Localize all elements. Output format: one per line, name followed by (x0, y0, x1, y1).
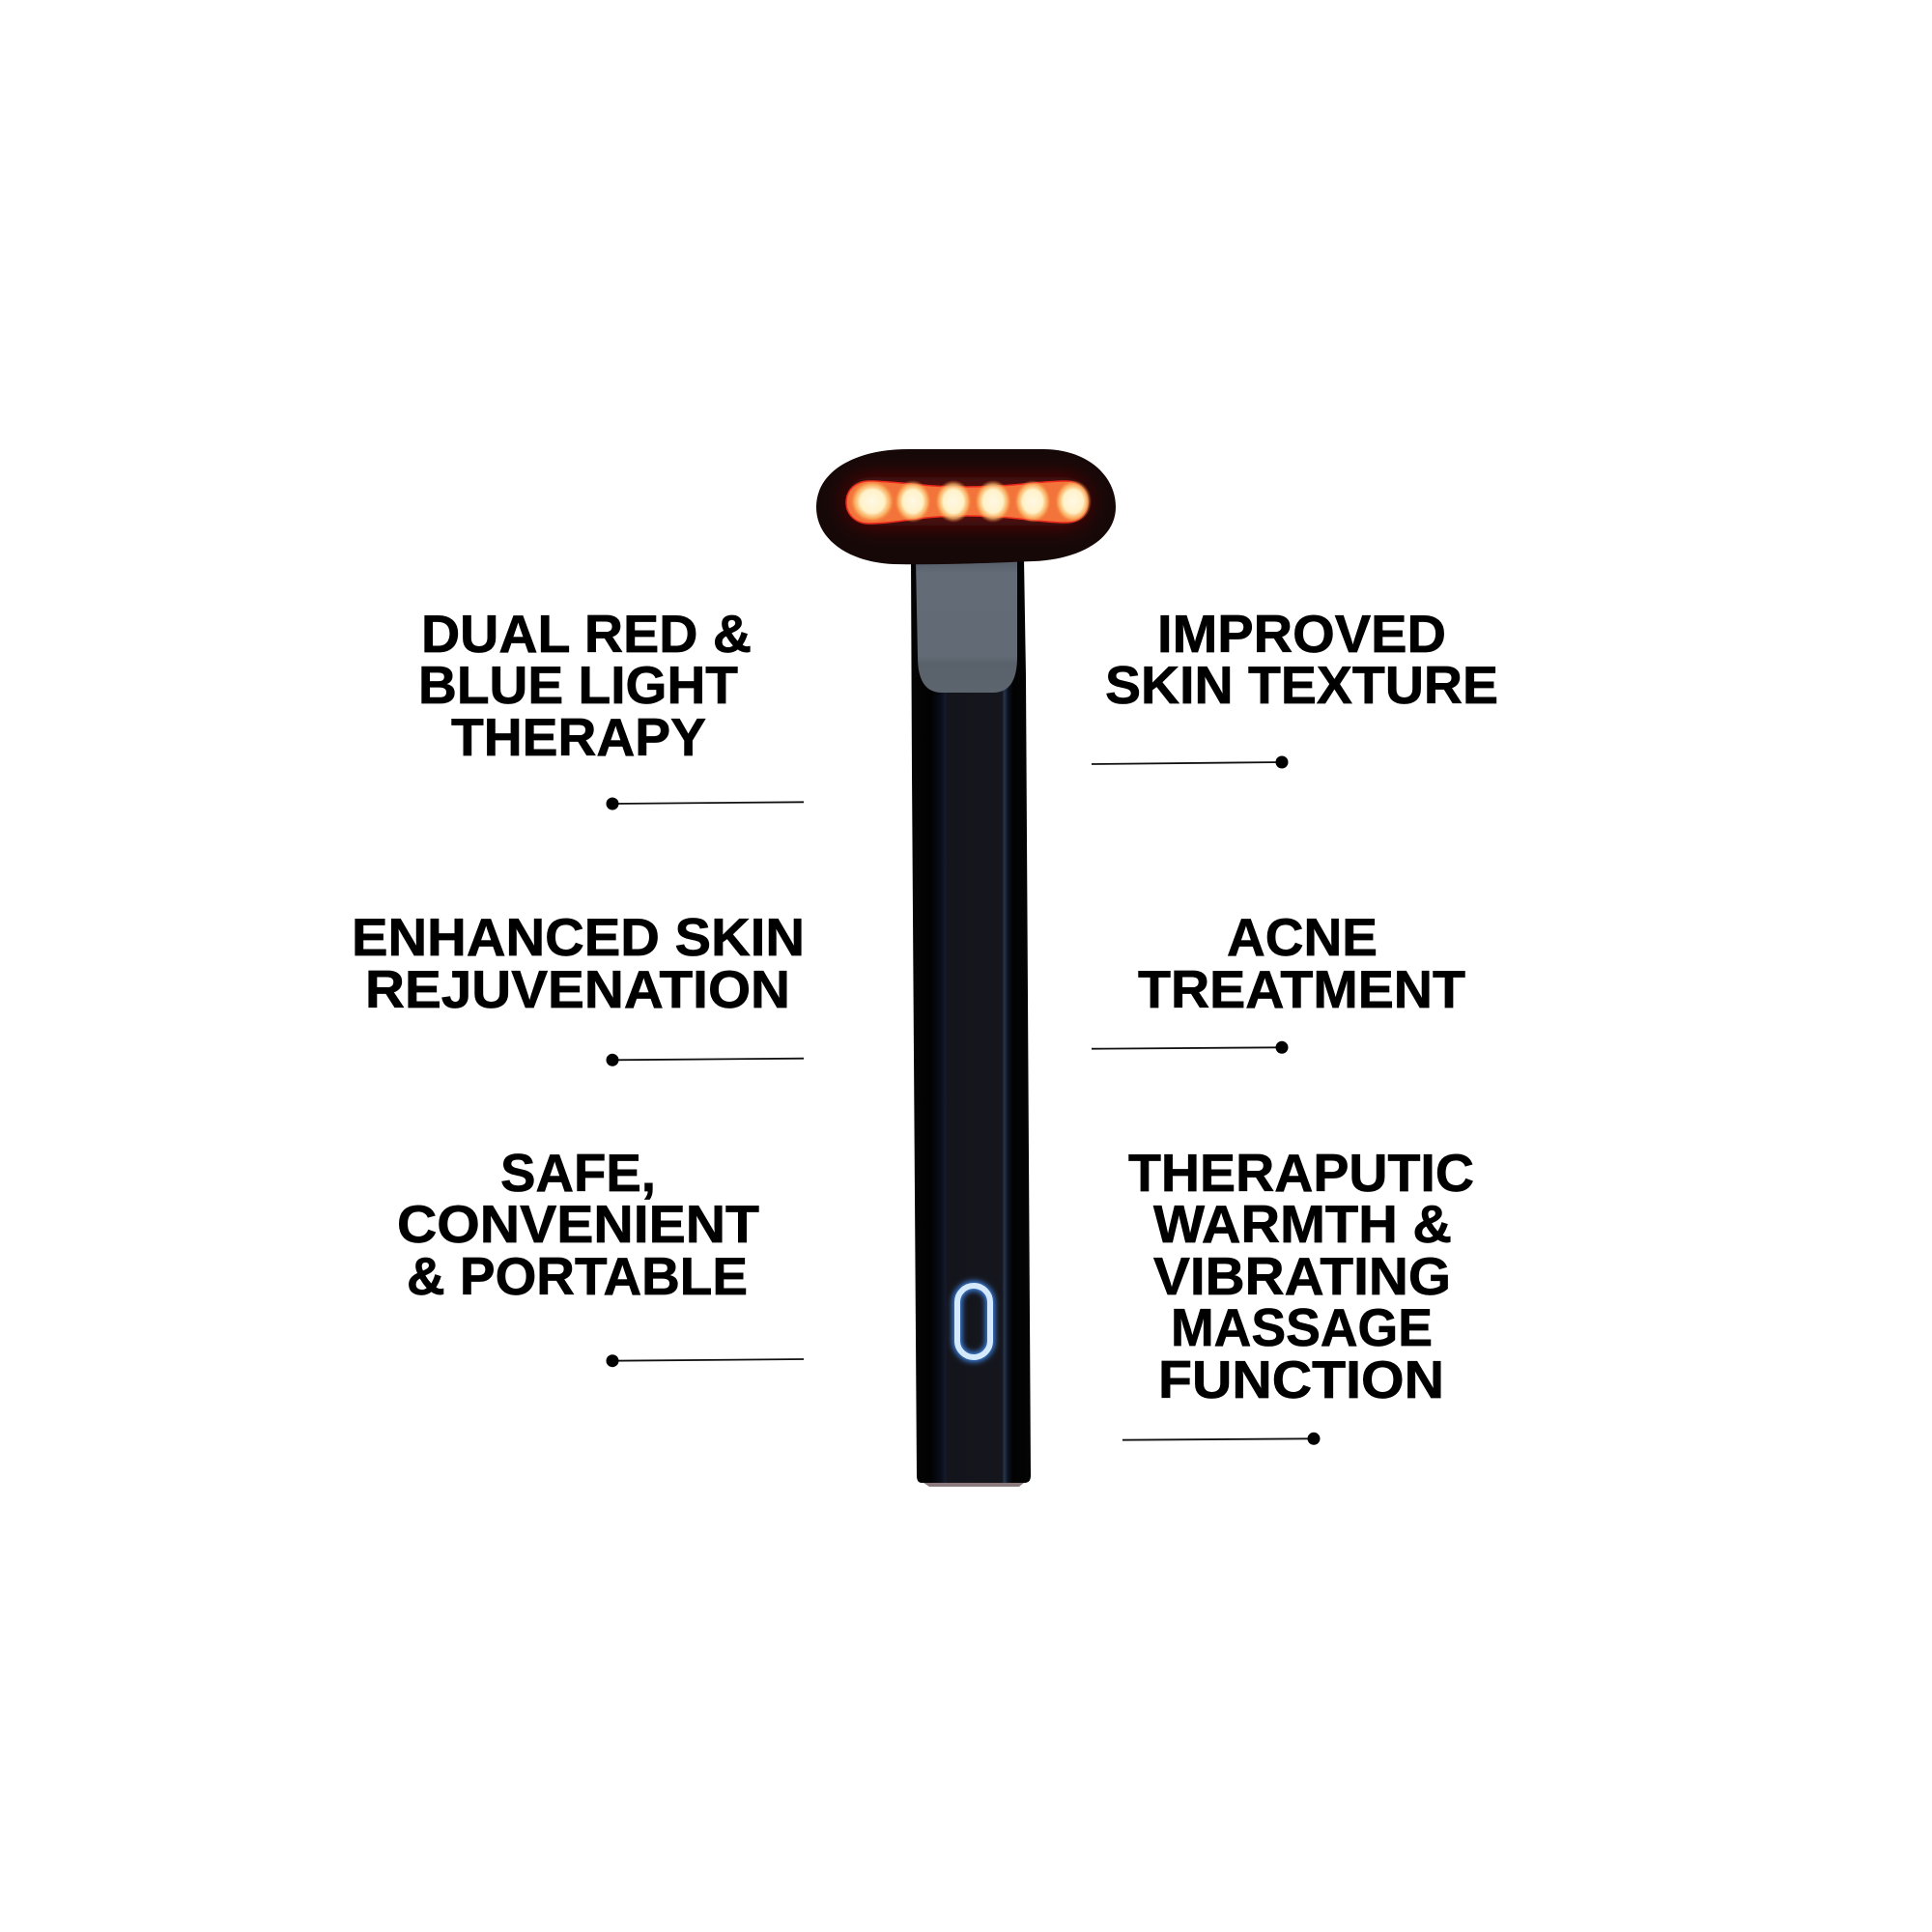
wand body (911, 558, 1031, 1483)
callout: improved skin texture (1092, 604, 1498, 769)
wand foot (923, 1483, 1024, 1487)
callout heading: CONVENIENT (397, 1194, 759, 1254)
callout leader line (607, 1354, 804, 1367)
LED lights (850, 480, 1092, 523)
callout heading (397, 1143, 759, 1306)
power button (957, 1286, 990, 1357)
callout leader line (1122, 1433, 1320, 1445)
callout heading (1128, 1143, 1474, 1409)
callout leader line (1092, 1041, 1289, 1054)
callout heading: ACNE (1227, 907, 1378, 967)
callout leader line (607, 1054, 804, 1066)
head red glow (845, 477, 1089, 526)
callout heading: IMPROVED (1157, 604, 1446, 664)
callout heading (352, 907, 805, 1019)
red light bar (846, 481, 1088, 524)
callout heading (1138, 907, 1465, 1019)
product: facial wand (816, 449, 1116, 1487)
callout heading: TREATMENT (1138, 959, 1465, 1019)
wand head (816, 449, 1116, 564)
callout heading: MASSAGE (1171, 1297, 1433, 1357)
callout heading: THERAPUTIC (1128, 1143, 1474, 1203)
callout heading: SKIN TEXTURE (1105, 655, 1498, 715)
callout: safe, convenient and portable (397, 1143, 804, 1367)
callout heading: ENHANCED SKIN (352, 907, 805, 967)
callout leader line (607, 798, 804, 810)
callout heading: VIBRATING (1153, 1246, 1451, 1306)
callout: dual red and blue light therapy (418, 604, 804, 810)
callout heading: REJUVENATION (365, 959, 790, 1019)
callout heading: DUAL RED & (421, 604, 752, 664)
callout heading: & PORTABLE (407, 1246, 748, 1306)
callout leader line (1092, 755, 1289, 769)
callout heading: WARMTH & (1153, 1194, 1452, 1254)
callout heading (1105, 604, 1498, 715)
callout: acne treatment (1092, 907, 1465, 1054)
callout heading: BLUE LIGHT (418, 655, 738, 715)
callout heading: SAFE, (500, 1143, 656, 1203)
callout heading (418, 604, 752, 767)
callout heading: THERAPY (451, 707, 706, 767)
callout heading: FUNCTION (1158, 1350, 1444, 1409)
callout: enhanced skin rejuvenation (352, 907, 805, 1066)
callout: therapeutic warmth and vibrating massage function (1122, 1143, 1474, 1445)
grey neck panel (916, 560, 1017, 693)
